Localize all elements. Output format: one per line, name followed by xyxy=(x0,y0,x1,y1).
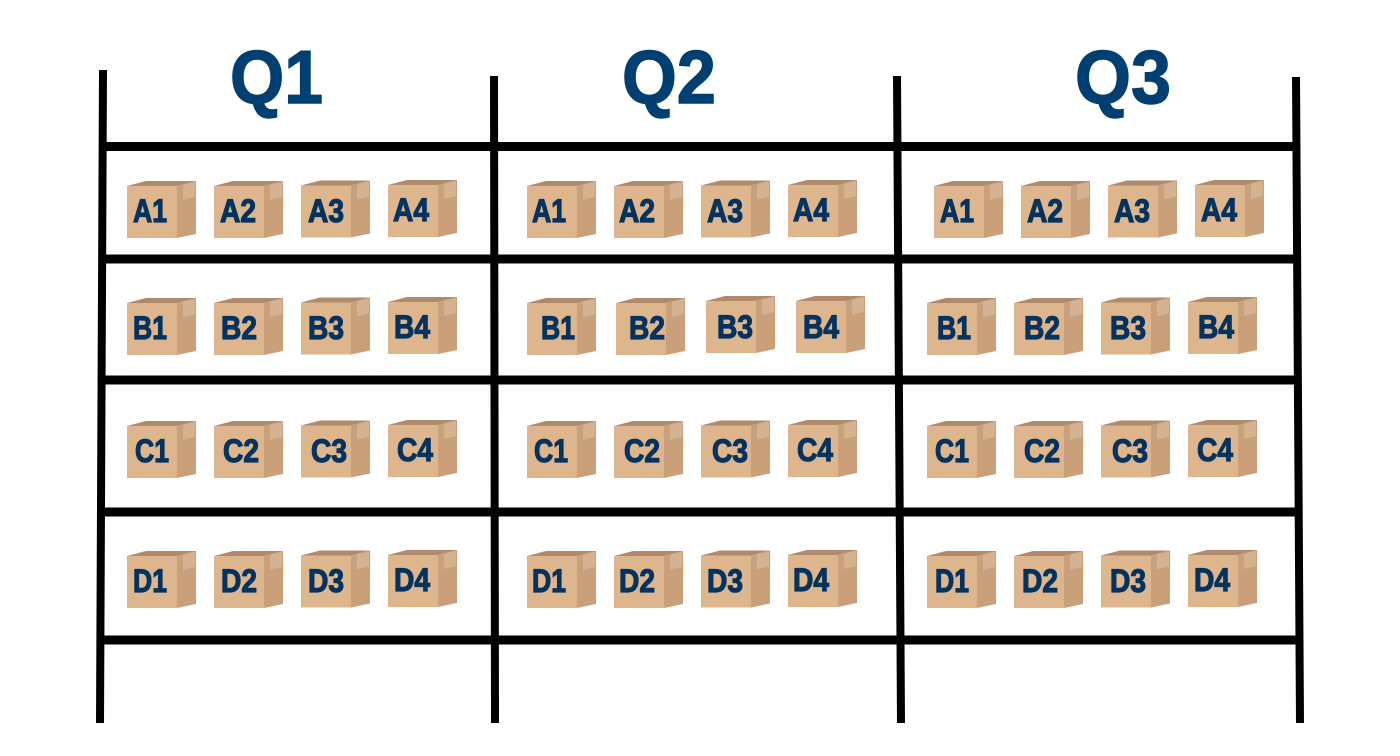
box Q1 A2 xyxy=(214,181,283,238)
box Q3 C2: C2 xyxy=(1024,433,1060,469)
box Q2 B3 xyxy=(706,296,775,353)
box Q1 D1: D1 xyxy=(133,563,167,599)
box Q3 B3 xyxy=(1101,298,1170,354)
box Q2 D3 xyxy=(701,550,770,608)
box Q1 B2 xyxy=(214,298,283,355)
box Q1 A4: A4 xyxy=(393,192,429,228)
box Q1 A4 xyxy=(388,180,457,237)
box Q3 A4 xyxy=(1195,180,1264,237)
box Q2 C1: C1 xyxy=(534,433,568,469)
box Q3 B4: B4 xyxy=(1198,309,1234,345)
box Q3 B2 xyxy=(1014,298,1083,355)
box Q2 C4: C4 xyxy=(797,432,833,468)
box Q3 B4 xyxy=(1188,297,1257,354)
shelving frame xyxy=(100,70,1300,723)
box Q2 A1 xyxy=(527,181,596,238)
box Q1 A2: A2 xyxy=(220,193,256,229)
box Q1 B3: B3 xyxy=(308,310,344,346)
box Q1 D4: D4 xyxy=(394,562,430,598)
heading: Q1: Q1 xyxy=(230,35,323,119)
box Q3 C1: C1 xyxy=(935,433,969,469)
box Q3 A2: A2 xyxy=(1027,193,1063,229)
box Q2 A3: A3 xyxy=(707,193,743,229)
box Q2 A3 xyxy=(701,180,770,238)
box Q2 D4: D4 xyxy=(793,562,829,598)
box Q1 C2 xyxy=(214,421,283,478)
box Q1 C1 xyxy=(127,421,196,478)
box Q3 C3 xyxy=(1101,420,1170,478)
box Q2 B2 xyxy=(616,298,685,355)
box Q2 D3: D3 xyxy=(707,563,743,599)
box Q3 D1 xyxy=(927,551,996,608)
box Q1 A1: A1 xyxy=(133,193,167,229)
heading: Q2: Q2 xyxy=(622,35,716,119)
box Q3 A4: A4 xyxy=(1201,192,1237,228)
box Q1 B2: B2 xyxy=(221,310,257,346)
box Q2 C3 xyxy=(701,420,770,478)
box Q2 C2 xyxy=(614,421,683,478)
box Q2 C3: C3 xyxy=(712,433,748,469)
panel: Q2 boxes xyxy=(527,180,865,608)
box Q1 C2: C2 xyxy=(223,433,259,469)
box Q1 B1 xyxy=(127,298,196,355)
box Q1 B1: B1 xyxy=(133,310,167,346)
box Q2 A2: A2 xyxy=(619,193,655,229)
panel: Q1 boxes xyxy=(127,180,457,608)
box Q2 A4 xyxy=(788,180,857,237)
box Q3 A3: A3 xyxy=(1114,193,1150,229)
box Q3 B1 xyxy=(927,298,996,355)
box Q1 C4 xyxy=(388,420,457,477)
box Q2 B4 xyxy=(796,296,865,353)
box Q3 A1: A1 xyxy=(940,193,974,229)
box Q3 D4 xyxy=(1188,550,1257,607)
panel: Q3 boxes xyxy=(927,180,1264,608)
box Q3 C4 xyxy=(1188,420,1257,477)
box Q2 A2 xyxy=(614,181,683,238)
box Q1 A3 xyxy=(301,180,370,238)
box Q2 B1: B1 xyxy=(541,310,575,346)
box Q1 D2 xyxy=(214,551,283,608)
box Q3 D3 xyxy=(1101,550,1170,608)
box Q3 D2 xyxy=(1014,551,1083,608)
box Q1 C3: C3 xyxy=(311,433,347,469)
box Q3 D4: D4 xyxy=(1194,562,1230,598)
box Q1 A3: A3 xyxy=(308,193,344,229)
box Q3 C3: C3 xyxy=(1112,433,1148,469)
box Q3 D3: D3 xyxy=(1110,563,1146,599)
box Q1 C3 xyxy=(301,420,370,478)
box Q2 B1 xyxy=(527,298,596,355)
box Q2 D2 xyxy=(614,551,683,608)
heading: Q3: Q3 xyxy=(1075,35,1171,119)
box Q2 D4 xyxy=(788,550,857,607)
box Q1 B3 xyxy=(301,298,370,354)
box Q1 B4: B4 xyxy=(394,309,430,345)
box Q1 D2: D2 xyxy=(221,563,257,599)
box Q1 D3: D3 xyxy=(308,563,344,599)
box Q2 A4: A4 xyxy=(793,192,829,228)
box Q1 C4: C4 xyxy=(397,432,433,468)
box Q2 C1 xyxy=(527,421,596,478)
box Q1 D1 xyxy=(127,551,196,608)
box Q3 B3: B3 xyxy=(1110,310,1146,346)
box Q2 D1: D1 xyxy=(532,563,566,599)
box Q3 A3 xyxy=(1108,180,1177,238)
box Q2 C4 xyxy=(788,420,857,477)
box Q3 D2: D2 xyxy=(1022,563,1058,599)
box Q3 A2 xyxy=(1021,181,1090,238)
box Q2 D1 xyxy=(527,551,596,608)
box Q2 A1: A1 xyxy=(532,193,566,229)
box Q3 C1 xyxy=(927,421,996,478)
box Q1 A1 xyxy=(127,181,196,238)
box Q2 B3: B3 xyxy=(717,309,753,345)
box Q1 D3 xyxy=(301,550,370,608)
box Q1 C1: C1 xyxy=(135,433,169,469)
box Q2 B2: B2 xyxy=(629,310,665,346)
box Q1 D4 xyxy=(388,550,457,607)
box Q2 B4: B4 xyxy=(803,309,839,345)
box Q2 C2: C2 xyxy=(624,433,660,469)
box Q3 C4: C4 xyxy=(1197,432,1233,468)
box Q3 A1 xyxy=(934,181,1003,238)
box Q2 D2: D2 xyxy=(619,563,655,599)
box Q3 B2: B2 xyxy=(1024,310,1060,346)
box Q3 B1: B1 xyxy=(937,310,971,346)
box Q3 D1: D1 xyxy=(935,563,969,599)
box Q1 B4 xyxy=(388,297,457,354)
box Q3 C2 xyxy=(1014,421,1083,478)
